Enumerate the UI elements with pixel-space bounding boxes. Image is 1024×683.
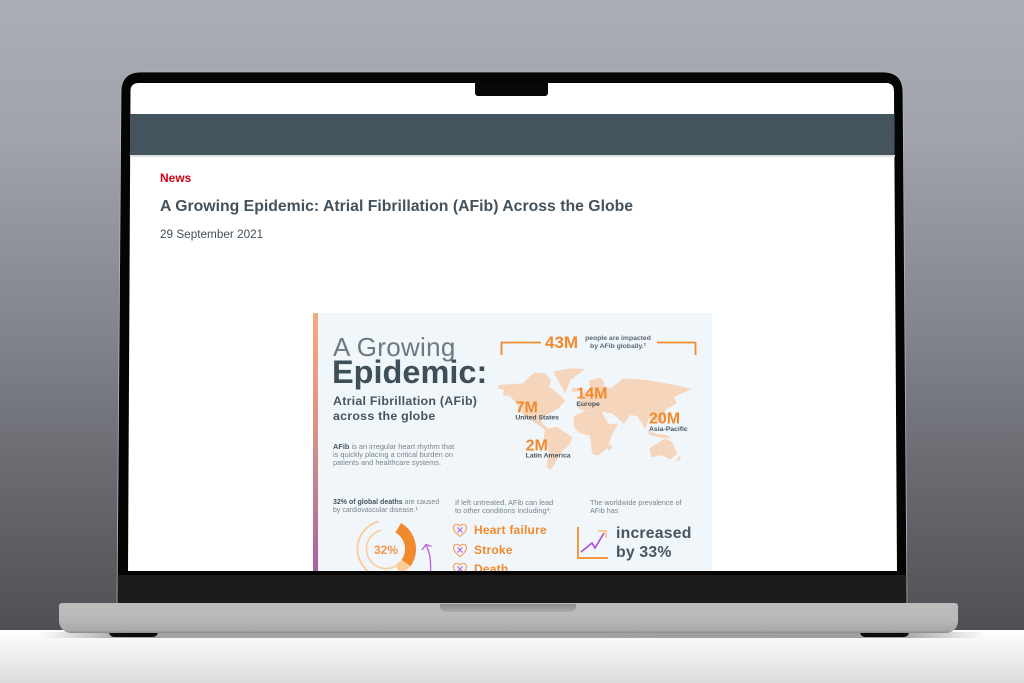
map label text: 2M [526, 437, 548, 454]
news label: News [160, 171, 191, 185]
total caption [585, 335, 651, 350]
conditions intro text: If left untreated, AFib can lead [455, 498, 553, 507]
article title: A Growing Epidemic: Atrial Fibrillation (AFib) Across the Globe [160, 198, 633, 215]
map label text [515, 386, 688, 460]
increase stat [616, 525, 692, 561]
map label text: 14M [576, 386, 607, 403]
laptop base [59, 603, 958, 633]
map label text: Europe [576, 401, 600, 408]
conditions intro text: to other conditions including³: [455, 506, 551, 515]
stat text: deaths [333, 498, 439, 514]
laptop foot left [109, 632, 158, 637]
intro text: AFib is an irregular heart rhythm that [333, 442, 454, 451]
donut chart [356, 520, 416, 571]
bracket lines [500, 342, 696, 355]
condition: heart failure: Heart failure [474, 523, 547, 537]
stat text: deaths: 32% of global deaths are caused [333, 499, 439, 506]
purple arrow [422, 544, 432, 571]
condition: stroke: Stroke [474, 543, 513, 557]
camera notch [475, 83, 548, 96]
donut value: 32% [374, 543, 398, 557]
world map [498, 368, 692, 470]
prevalence intro text [590, 498, 682, 515]
intro text [333, 442, 454, 467]
total value: 43M [545, 333, 578, 352]
gradient side bar [313, 313, 318, 571]
prevalence intro text: AFib has [590, 506, 618, 515]
article date: 29 September 2021 [160, 228, 263, 241]
increase stat: increased [616, 525, 692, 542]
subheading: Atrial Fibrillation (AFib) [333, 394, 477, 408]
map label text: Asia-Pacific [649, 426, 688, 433]
map label text: Latin America [526, 453, 571, 460]
floor [0, 630, 1024, 683]
infographic panel [313, 313, 712, 571]
icon: heart x [452, 544, 468, 558]
icon: heart x [452, 524, 468, 538]
prevalence intro text: The worldwide prevalence of [590, 498, 682, 507]
subheading [333, 394, 477, 422]
subheading: across the globe [333, 408, 435, 422]
increase stat: by 33% [616, 544, 672, 561]
intro text: is quickly placing a critical burden on [333, 450, 453, 459]
heading: a growing: A Growing [333, 332, 456, 362]
intro text: patients and healthcare systems. [333, 458, 441, 467]
laptop foot right [860, 632, 909, 637]
icon: trend chart [577, 527, 608, 559]
floor shadow [40, 632, 984, 638]
heading: epidemic: Epidemic: [332, 354, 487, 390]
icon: heart x [452, 562, 468, 571]
map label text: 7M [516, 399, 538, 416]
map label text: United States [515, 415, 559, 422]
trackpad notch [440, 604, 576, 612]
stat text: deaths: by cardiovascular disease.¹ [333, 507, 418, 514]
total caption: people are impacted [585, 335, 651, 342]
conditions list [452, 523, 547, 571]
total caption: by AFib globally.² [590, 343, 646, 350]
conditions intro text [455, 498, 553, 515]
map label text: 20M [649, 411, 680, 428]
